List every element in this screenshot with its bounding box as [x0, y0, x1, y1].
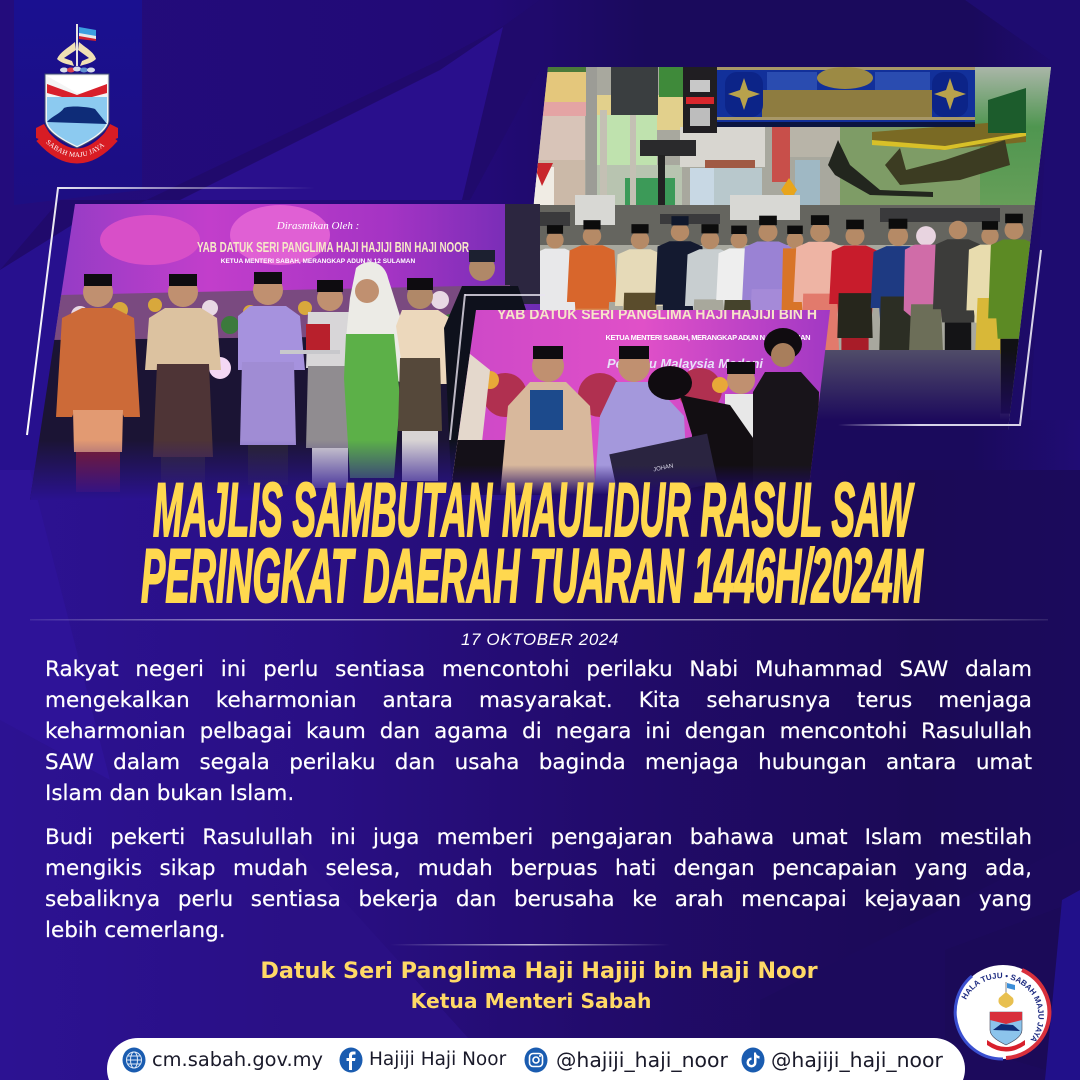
paragraph one	[45, 657, 1032, 806]
blue plaque	[530, 390, 563, 430]
photo: stage presentation group	[26, 187, 540, 500]
person: green dress with hijab	[344, 262, 401, 478]
person: grey man glasses	[725, 362, 755, 438]
person: student bowing	[648, 366, 753, 494]
calligraphy banner	[717, 67, 975, 127]
person: grey baju	[306, 280, 349, 488]
signatory name: Datuk Seri Panglima Haji Hajiji bin Haji Noor	[260, 958, 818, 984]
crowd of walkers	[531, 214, 1040, 414]
tiktok handle: @hajiji_haji_noor	[771, 1048, 943, 1072]
person: student standing	[753, 328, 819, 502]
paragraph two: Budi pekerti Rasulullah ini juga memberi pengajaran bahawa umat Islam mestilah	[45, 825, 1032, 850]
signboard: Johan cheque: JOHAN	[653, 463, 674, 473]
backdrop lettering: Dirasmikan Oleh :	[276, 220, 359, 232]
person: beige baju	[145, 274, 221, 492]
paragraph one: Rakyat negeri ini perlu sentiasa mencontohi perilaku Nabi Muhammad SAW dalam	[45, 657, 1032, 682]
paragraph two: sebaliknya perlu sentiasa bekerja dan berusaha ke arah mencapai kejayaan yang	[45, 887, 1032, 912]
website link: cm.sabah.gov.my	[152, 1048, 323, 1071]
photo: Chief Minister with students	[449, 294, 830, 495]
person: orange baju	[56, 274, 140, 492]
date: 17 OKTOBER 2024	[461, 630, 619, 649]
backdrop lettering: KETUA MENTERI SABAH, MERANGKAP ADUN N.12 SULAMAN	[221, 258, 416, 265]
backdrop lettering: KETUA MENTERI SABAH, MERANGKAP ADUN N.12 SULAMAN	[606, 333, 810, 342]
signatory role: Ketua Menteri Sabah	[411, 989, 651, 1013]
paragraph one: Islam dan bukan Islam.	[45, 781, 294, 806]
paragraph one: SAW dalam segala perilaku dan usaha baginda menjaga hubungan antara umat	[45, 750, 1032, 775]
logo: Hala Tuju Sabah Maju Jaya badge: HALA TUJU • SABAH MAJU JAYA	[961, 972, 1044, 1042]
backdrop lettering	[197, 220, 469, 265]
promo board	[683, 67, 717, 133]
icon: facebook	[340, 1048, 362, 1072]
footer pill	[107, 1038, 965, 1080]
icon: globe	[122, 1048, 146, 1072]
paragraph two: mengikis sikap mudah selesa, mudah berpuas hati dengan pencapaian yang ada,	[45, 856, 1032, 881]
person: police officer	[444, 250, 526, 478]
paragraph one: mengekalkan keharmonian antara masyarakat. Kita seharusnya terus menjaga	[45, 688, 1032, 713]
photo: street procession	[534, 67, 1051, 430]
instagram handle: @hajiji_haji_noor	[556, 1048, 728, 1072]
logo: Sabah coat of arms: SABAH MAJU JAYA	[46, 140, 105, 157]
paragraph two: lebih cemerlang.	[45, 918, 226, 943]
icon: tiktok	[742, 1048, 764, 1072]
icon: instagram	[524, 1048, 548, 1072]
paragraph two	[45, 825, 1032, 943]
paragraph one: keharmonian pelbagai kaum dan agama di negara ini dengan mencontohi Rasulullah	[45, 719, 1032, 744]
person: cream baju right	[396, 278, 452, 481]
signboard: Johan cheque	[609, 434, 718, 494]
backdrop lettering: Pemacu Malaysia Madani	[607, 356, 763, 371]
backdrop lettering: YAB DATUK SERI PANGLIMA HAJI HAJIJI BIN H	[497, 306, 817, 323]
person: man with plaque	[500, 346, 596, 496]
backdrop lettering: YAB DATUK SERI PANGLIMA HAJI HAJIJI BIN HAJI NOOR	[197, 239, 469, 256]
facebook label: Hajiji Haji Noor	[369, 1049, 506, 1070]
award plaque	[280, 324, 340, 354]
person: lilac baju	[238, 272, 305, 485]
person: lilac baju	[594, 346, 688, 496]
backdrop lettering	[497, 306, 817, 371]
